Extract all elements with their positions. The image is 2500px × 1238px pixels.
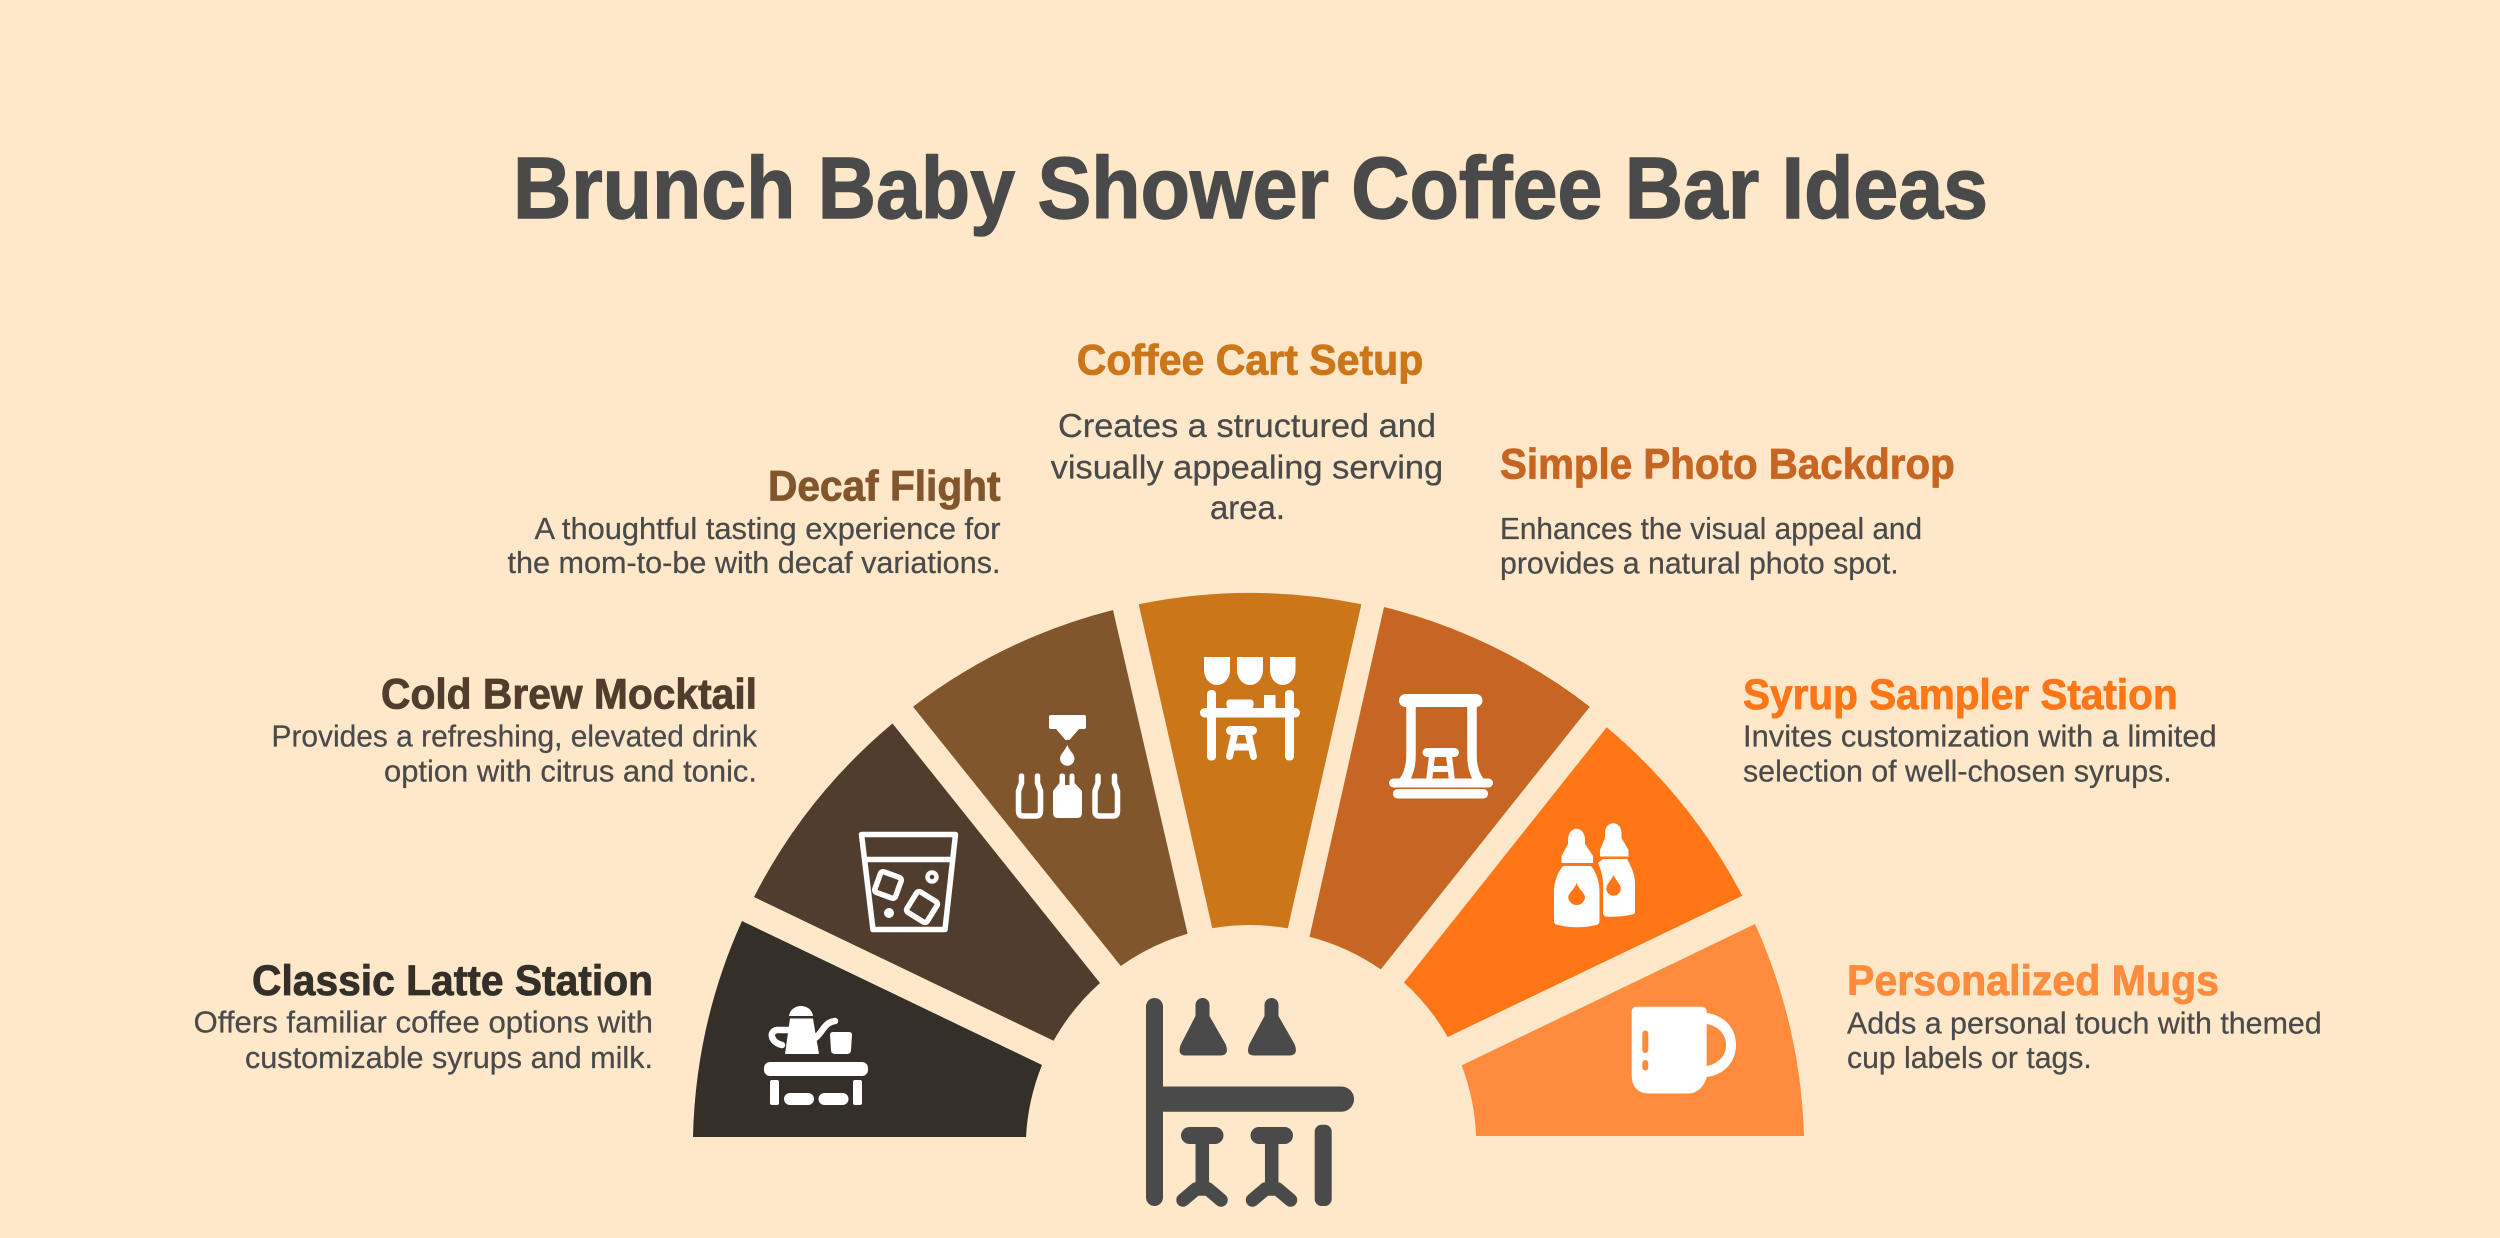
segment: Syrup Sampler Station bbox=[1404, 727, 1742, 1037]
description: Coffee Cart Setup: Creates a structured and bbox=[1058, 407, 1436, 444]
description: Simple Photo Backdrop: Enhances the visual appeal and bbox=[1500, 512, 1922, 546]
icon: iced glass bbox=[862, 834, 956, 930]
description: Syrup Sampler Station: Invites customization with a limited bbox=[1743, 720, 2217, 754]
description: Personalized Mugs bbox=[1847, 1006, 2322, 1075]
panel: Cold Brew Mocktail bbox=[272, 672, 1100, 1041]
description: Classic Latte Station: Offers familiar coffee options with bbox=[194, 1006, 653, 1040]
heading: Personalized Mugs: Personalized Mugs bbox=[1847, 958, 2219, 1005]
heading: Classic Latte Station: Classic Latte Station bbox=[252, 958, 653, 1005]
title: Brunch Baby Shower Coffee Bar Ideas bbox=[513, 140, 1988, 237]
description: Decaf Flight: A thoughtful tasting experience for bbox=[534, 512, 1000, 546]
icon: mug bbox=[1632, 1007, 1736, 1094]
panel: Classic Latte Station bbox=[194, 921, 1042, 1137]
segment: Cold Brew Mocktail bbox=[754, 724, 1100, 1041]
icon: two syrup bottles bbox=[1554, 823, 1635, 927]
description: Syrup Sampler Station: selection of well-chosen syrups. bbox=[1743, 755, 2172, 789]
description: Classic Latte Station bbox=[194, 1006, 653, 1075]
description: Coffee Cart Setup bbox=[1051, 407, 1443, 526]
panel: Personalized Mugs bbox=[1462, 924, 2322, 1136]
segment: Simple Photo Backdrop bbox=[1310, 607, 1590, 969]
description: Simple Photo Backdrop: provides a natural photo spot. bbox=[1500, 546, 1899, 580]
panel: Syrup Sampler Station bbox=[1404, 672, 2217, 1037]
segment: Classic Latte Station bbox=[693, 921, 1042, 1137]
description: Cold Brew Mocktail bbox=[272, 719, 758, 789]
description: Personalized Mugs: cup labels or tags. bbox=[1847, 1041, 2092, 1075]
panel: Coffee Cart Setup bbox=[1051, 338, 1443, 928]
description: Cold Brew Mocktail: option with citrus and tonic. bbox=[384, 755, 757, 789]
description: Personalized Mugs: Adds a personal touch with themed bbox=[1847, 1006, 2322, 1040]
heading: Cold Brew Mocktail: Cold Brew Mocktail bbox=[381, 672, 757, 718]
segment: Coffee Cart Setup bbox=[1139, 593, 1361, 928]
segment: Personalized Mugs bbox=[1462, 924, 1804, 1136]
icon: central coffee bar with lamps and stools bbox=[1146, 998, 1354, 1206]
heading: Syrup Sampler Station: Syrup Sampler Station bbox=[1743, 672, 2178, 719]
icon: kettle and cup on table bbox=[764, 1006, 868, 1105]
description: Simple Photo Backdrop bbox=[1500, 512, 1922, 580]
description: Decaf Flight bbox=[508, 512, 1000, 580]
description: Decaf Flight: the mom-to-be with decaf variations. bbox=[508, 546, 1000, 580]
segment: Decaf Flight bbox=[913, 610, 1188, 966]
panel: Decaf Flight bbox=[508, 464, 1188, 966]
heading: Decaf Flight: Decaf Flight bbox=[768, 464, 1000, 510]
heading: Coffee Cart Setup: Coffee Cart Setup bbox=[1077, 338, 1423, 384]
description: Syrup Sampler Station bbox=[1743, 720, 2217, 789]
icon: coffee cart bbox=[1200, 657, 1300, 760]
description: Cold Brew Mocktail: Provides a refreshing, elevated drink bbox=[272, 719, 758, 753]
description: Classic Latte Station: customizable syrups and milk. bbox=[245, 1041, 653, 1075]
description: Coffee Cart Setup: area. bbox=[1210, 489, 1285, 526]
description: Coffee Cart Setup: visually appealing serving bbox=[1051, 449, 1443, 486]
icon: dripper and three bottles bbox=[1018, 715, 1118, 818]
panel: Simple Photo Backdrop bbox=[1310, 442, 1955, 969]
icon: photo backdrop with stool bbox=[1389, 694, 1493, 798]
heading: Simple Photo Backdrop: Simple Photo Backdrop bbox=[1500, 442, 1955, 488]
